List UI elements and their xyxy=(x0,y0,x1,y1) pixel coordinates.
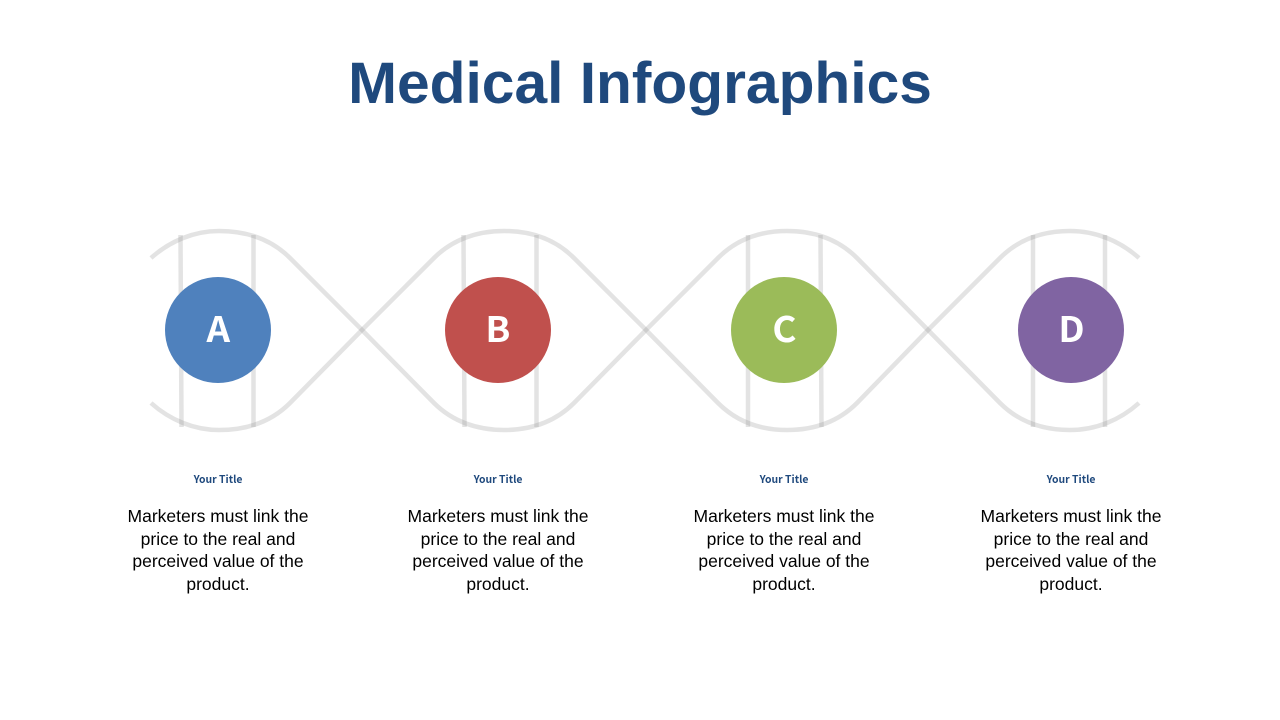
text: Marketers must link the xyxy=(128,506,308,526)
text: Marketers must link the xyxy=(981,506,1161,526)
circle B: B xyxy=(485,302,511,353)
circle A xyxy=(165,277,271,383)
text: price to the real and xyxy=(421,529,575,549)
circle C: C xyxy=(772,302,796,353)
text: Marketers must link the xyxy=(694,506,874,526)
circle A: A xyxy=(206,302,230,353)
circle C xyxy=(731,277,837,383)
text: Your Title xyxy=(194,471,242,486)
text: product. xyxy=(466,574,530,594)
text: product. xyxy=(186,574,250,594)
text: Your Title xyxy=(1047,471,1095,486)
text block A xyxy=(128,471,308,594)
circle D: D xyxy=(1058,302,1084,353)
circle B xyxy=(445,277,551,383)
text: perceived value of the xyxy=(412,551,584,571)
text: price to the real and xyxy=(141,529,295,549)
text: price to the real and xyxy=(994,529,1148,549)
title: Medical Infographics xyxy=(348,51,932,116)
text: product. xyxy=(752,574,816,594)
text: perceived value of the xyxy=(132,551,304,571)
text: product. xyxy=(1039,574,1103,594)
text: price to the real and xyxy=(707,529,861,549)
circle D xyxy=(1018,277,1124,383)
text: Your Title xyxy=(474,471,522,486)
text: perceived value of the xyxy=(698,551,870,571)
text block B xyxy=(408,471,588,594)
text block C xyxy=(694,471,874,594)
text block D xyxy=(981,471,1161,594)
text: perceived value of the xyxy=(985,551,1157,571)
text: Your Title xyxy=(760,471,808,486)
text: Marketers must link the xyxy=(408,506,588,526)
